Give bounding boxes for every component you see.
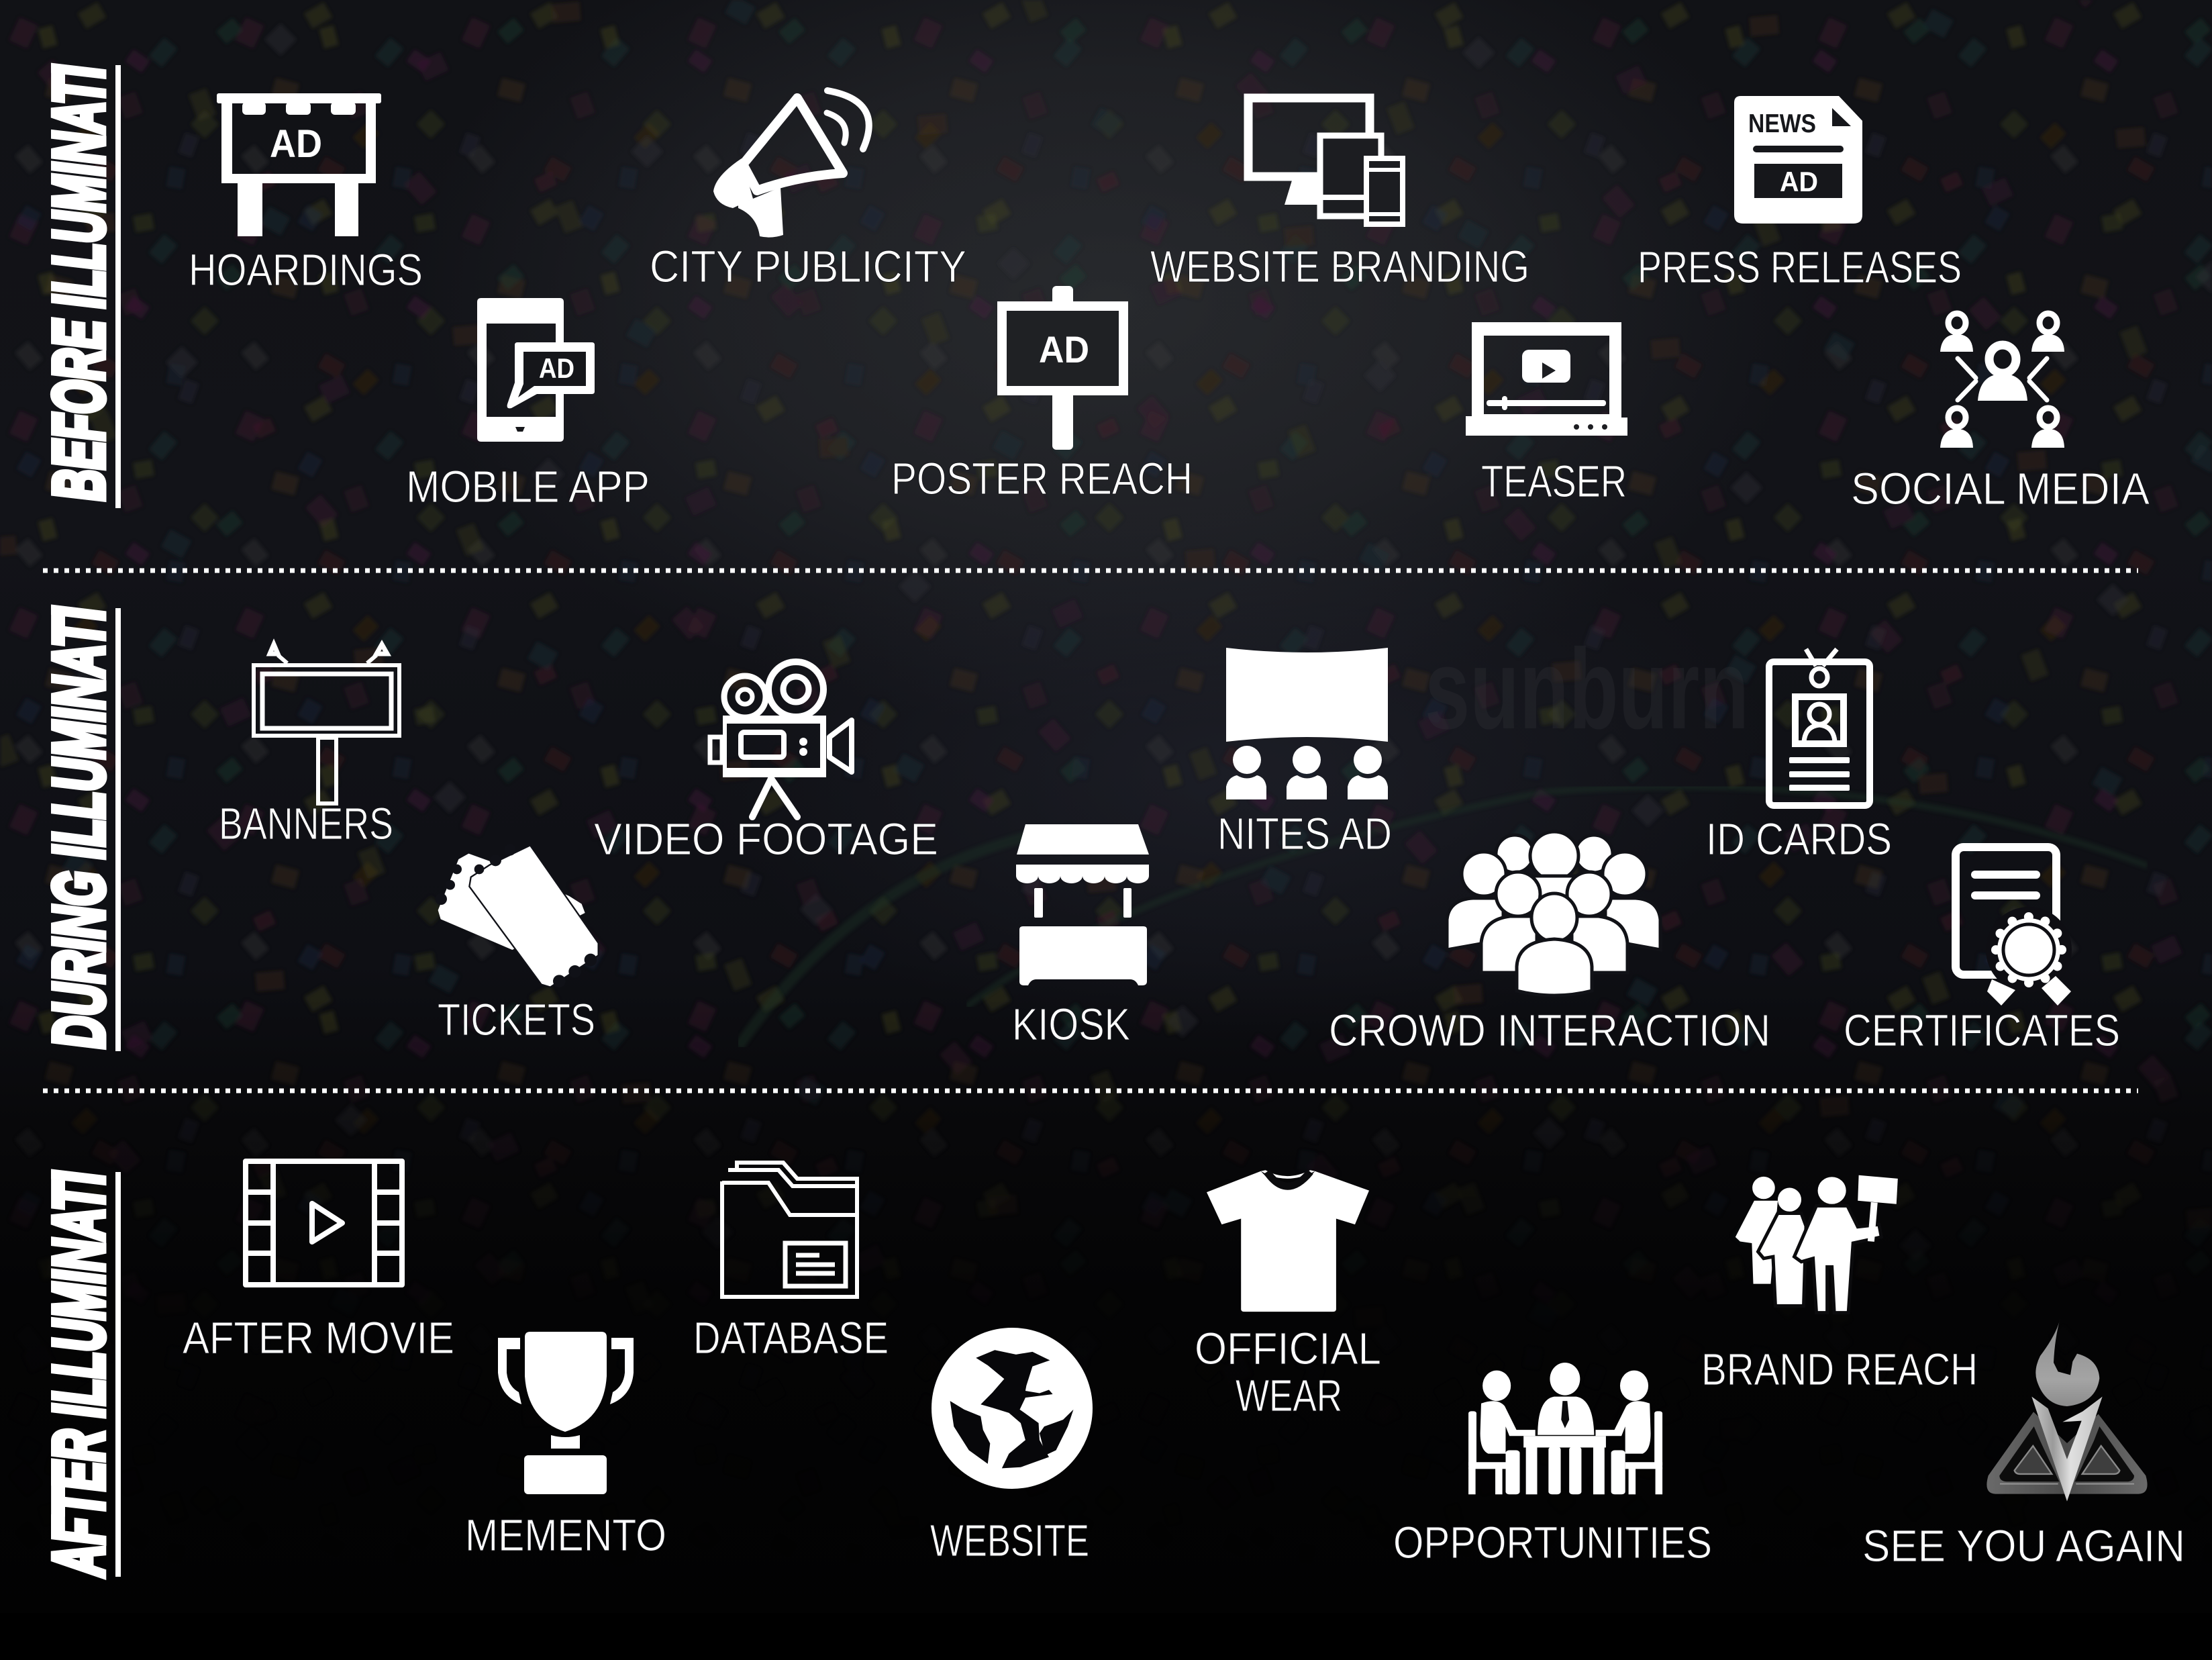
label: poster reach: POSTER REACH bbox=[891, 454, 1193, 504]
icon: banner board bbox=[254, 644, 399, 803]
label: teaser: TEASER bbox=[1481, 456, 1627, 507]
icon: newspaper: AD bbox=[1780, 166, 1818, 197]
icon: brand reach group with sign bbox=[1736, 1175, 1898, 1313]
icon: megaphone bbox=[713, 91, 869, 238]
icon: mobile app bbox=[477, 298, 595, 442]
label: id cards: ID CARDS bbox=[1706, 814, 1892, 865]
label: memento: MEMENTO bbox=[465, 1510, 666, 1561]
background: dimmed concert crowd and confetti: sunburn bbox=[1425, 626, 1749, 753]
icon: cinema screen audience bbox=[1226, 648, 1388, 799]
heading: during illuminati: DURING ILLUMINATI bbox=[38, 607, 119, 1048]
icon: kiosk stall bbox=[1016, 824, 1149, 985]
icon: poster board: AD bbox=[1039, 328, 1089, 371]
label: nites ad: NITES AD bbox=[1217, 809, 1392, 859]
divider bar: during bbox=[115, 608, 121, 1051]
icon: tickets bbox=[436, 844, 599, 987]
icon: mobile app: AD bbox=[539, 352, 574, 384]
heading: after illuminati: AFTER ILLUMINATI bbox=[38, 1171, 119, 1577]
label: brand reach: BRAND REACH bbox=[1701, 1345, 1978, 1395]
label: official wear: WEAR bbox=[1236, 1371, 1342, 1421]
icon: hoarding billboard bbox=[217, 93, 381, 236]
icon: social media network bbox=[1940, 313, 2064, 448]
section: before illuminati bbox=[38, 65, 2150, 514]
icon: database folder bbox=[722, 1163, 857, 1297]
icon: trophy bbox=[498, 1332, 634, 1494]
icon: certificate with seal bbox=[1956, 847, 2072, 1006]
icon: film strip bbox=[246, 1161, 402, 1285]
icon: meeting table bbox=[1468, 1363, 1662, 1494]
label: hoardings: HOARDINGS bbox=[189, 245, 423, 295]
label: banners: BANNERS bbox=[219, 799, 393, 849]
icon: t-shirt bbox=[1207, 1170, 1369, 1312]
label: database: DATABASE bbox=[693, 1313, 889, 1363]
label: tickets: TICKETS bbox=[438, 995, 595, 1045]
icon: crowd of people bbox=[1447, 832, 1660, 995]
icon: illuminati logo bbox=[1987, 1318, 2148, 1502]
label: press releases: PRESS RELEASES bbox=[1638, 242, 1962, 293]
label: website branding: WEBSITE BRANDING bbox=[1150, 242, 1529, 292]
divider bar: after bbox=[115, 1172, 121, 1577]
label: after movie: AFTER MOVIE bbox=[183, 1313, 454, 1363]
label: official wear bbox=[1195, 1324, 1381, 1421]
label: see you again: SEE YOU AGAIN bbox=[1862, 1521, 2185, 1571]
icon: video teaser laptop bbox=[1466, 322, 1627, 436]
section: during illuminati bbox=[38, 607, 2120, 1056]
label: social media: SOCIAL MEDIA bbox=[1851, 464, 2150, 514]
label: website: WEBSITE bbox=[930, 1516, 1089, 1566]
background: dimmed concert crowd and confetti bbox=[0, 0, 2212, 1301]
icon: globe bbox=[932, 1328, 1093, 1489]
label: mobile app: MOBILE APP bbox=[406, 462, 650, 512]
icon: hoarding billboard: AD bbox=[270, 122, 322, 166]
icon: newspaper: NEWS bbox=[1748, 109, 1816, 138]
divider bar: before bbox=[115, 65, 121, 508]
label: opportunities: OPPORTUNITIES bbox=[1393, 1518, 1712, 1568]
icon: poster board bbox=[997, 286, 1128, 450]
label: certificates: CERTIFICATES bbox=[1844, 1006, 2120, 1056]
section: after illuminati bbox=[38, 1161, 2185, 1577]
icon: responsive devices bbox=[1248, 98, 1403, 224]
icon: id card bbox=[1769, 649, 1870, 805]
label: city publicity: CITY PUBLICITY bbox=[650, 242, 966, 292]
icon: movie camera bbox=[710, 662, 852, 817]
label: official wear: OFFICIAL bbox=[1195, 1324, 1381, 1374]
label: crowd interaction: CROWD INTERACTION bbox=[1329, 1006, 1770, 1056]
icon: newspaper bbox=[1734, 96, 1862, 224]
label: kiosk: KIOSK bbox=[1012, 999, 1130, 1050]
label: video footage: VIDEO FOOTAGE bbox=[594, 814, 938, 865]
